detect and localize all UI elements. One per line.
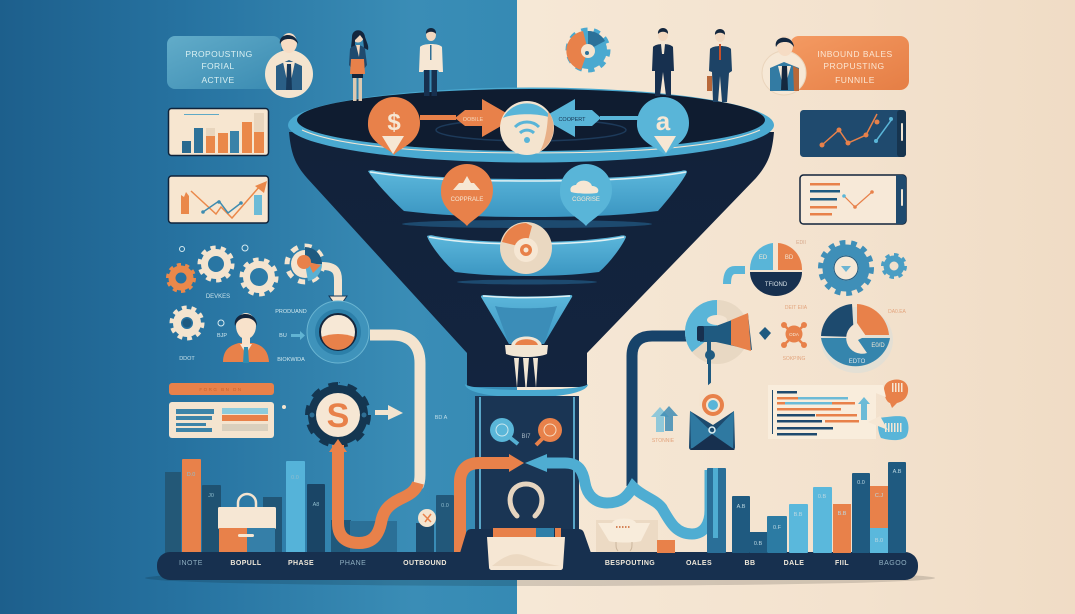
base trapezoid	[460, 529, 591, 553]
callout: blue	[868, 416, 908, 440]
base bar with labels: BB	[745, 560, 755, 567]
icon: briefcase	[218, 494, 276, 553]
pin: blue tier cloud	[560, 164, 612, 226]
phone card: line chart	[800, 110, 906, 157]
arrow: gear to gauge	[322, 266, 338, 298]
bar chart: right: A.B	[737, 504, 746, 510]
pipe: small light blue	[727, 270, 745, 284]
funnel tier 3	[481, 295, 572, 344]
pin: wifi circle	[500, 101, 554, 155]
title box: left: PROPOUSTING	[185, 49, 253, 59]
pin: orange dollar: $	[387, 109, 401, 136]
funnel tier 2	[427, 235, 626, 284]
pin: blue tier cloud: CGGRISE	[572, 197, 600, 203]
gear: large blue	[821, 243, 871, 293]
icon: top gear pie	[566, 30, 608, 70]
panel: right inbound column	[651, 36, 909, 450]
chart card: bars	[168, 108, 268, 156]
pipe: dark right	[632, 336, 688, 486]
pin: target circle	[500, 222, 552, 274]
bar chart: right: B.B	[838, 511, 847, 517]
pin: orange dollar	[368, 97, 420, 155]
bar chart: right: 0.B	[754, 541, 762, 547]
base bar with labels: BOPULL	[230, 560, 262, 567]
label: side: BD A	[435, 415, 448, 421]
column below funnel	[475, 396, 579, 534]
icon: orange gear	[168, 265, 194, 291]
funnel opening	[297, 89, 765, 151]
base bar with labels: PHASE	[288, 560, 314, 567]
arrow: small blue	[291, 331, 305, 340]
base bar with labels: DALE	[784, 560, 804, 567]
bar chart: left	[165, 459, 454, 553]
icon: megaphone	[685, 300, 752, 396]
bar chart: left: 0.0	[441, 503, 449, 509]
icon: horseshoe	[510, 484, 542, 516]
person: woman	[349, 30, 368, 101]
labels: beside gauge	[217, 309, 307, 363]
icon: up arrows	[651, 406, 678, 432]
icon: small coin	[418, 509, 436, 527]
arrow: blue to wifi: COOPERT	[558, 117, 586, 123]
icon: multicolour gear	[287, 246, 323, 282]
title box: right: PROPUSTING	[823, 61, 885, 71]
bar chart: right: 0.0	[857, 480, 865, 486]
gears row	[168, 245, 323, 326]
arrowhead: orange up	[329, 439, 347, 452]
bar chart: right: 0.B	[818, 494, 826, 500]
tray box	[487, 528, 565, 570]
pie chart: EDII	[796, 240, 806, 246]
title box: right: FUNNILE	[835, 75, 875, 85]
arrowhead: blue center	[525, 454, 547, 472]
title box: right: INBOUND BALES	[817, 49, 893, 59]
avatar: right presenter	[762, 36, 806, 95]
icon: orange node	[781, 322, 807, 348]
funnel body	[289, 132, 774, 387]
bowl backing card	[596, 520, 658, 553]
labels: near node: DEIT EIIA	[785, 305, 808, 311]
icon: orange magnifier	[536, 418, 562, 445]
funnel neck flange	[465, 384, 588, 398]
pin: blue a: a	[656, 106, 671, 136]
person: man cream jacket	[419, 28, 443, 96]
pie chart	[750, 240, 806, 296]
rim highlight	[302, 130, 760, 153]
pipe: orange lower left	[338, 445, 418, 543]
base bar with labels	[157, 552, 918, 580]
title box: left	[167, 36, 281, 89]
arrow: blue to wifi	[542, 99, 638, 137]
title box: right	[790, 36, 909, 90]
bar chart: right	[707, 462, 906, 553]
gear: cream single	[172, 308, 202, 338]
funnel rim	[288, 88, 774, 162]
donut chart	[821, 304, 893, 373]
label: gear: DDOT	[179, 356, 195, 362]
base bar with labels: OALES	[686, 560, 712, 567]
arrow: orange to wifi	[420, 99, 515, 137]
base bar with labels: PHANE	[340, 560, 366, 567]
person: man with case	[707, 29, 732, 102]
label: gears: DEVKES	[206, 294, 230, 300]
orange block	[657, 540, 675, 553]
title box: left: ACTIVE	[201, 75, 235, 85]
bar chart: left: A8	[313, 502, 319, 508]
arrow: right cream	[375, 405, 403, 420]
label: column: BI7	[521, 434, 531, 440]
gear: dollar S: S	[327, 397, 349, 435]
pipe: blue right	[543, 463, 710, 534]
funnel spout ring	[505, 336, 548, 394]
pie chart: ED	[759, 255, 768, 261]
icon: envelope	[689, 381, 735, 450]
pin: orange tier	[441, 164, 493, 226]
phone card: list chart	[800, 175, 906, 224]
bar chart: right: C.J	[875, 493, 883, 499]
base shadow	[145, 570, 935, 586]
base bar with labels: FIIL	[835, 560, 849, 567]
bar chart: right: B.0	[875, 538, 883, 544]
labels: near node: DA0.EA	[888, 309, 907, 315]
bar chart: right: A.B	[893, 469, 902, 475]
labels: near node: SOKPING	[783, 356, 805, 362]
person: orange suit	[223, 313, 269, 363]
person: man black suit	[652, 28, 674, 96]
panel: left outbound column	[167, 33, 448, 486]
arrow: orange to wifi: OOBILE	[463, 117, 484, 123]
funnel tier 1	[368, 170, 687, 228]
background: cream right half	[517, 0, 1075, 614]
gauge circle	[307, 301, 369, 363]
icon: blue magnifier	[490, 418, 518, 444]
bar chart: left: 0.0	[291, 475, 299, 481]
dot	[282, 405, 286, 409]
labels: near node: STONNIE	[652, 438, 675, 444]
pin: orange tier: COPPRALE	[451, 197, 483, 203]
chart card: trend lines	[168, 176, 268, 223]
pie chart: BD	[785, 255, 794, 261]
bar chart: left: D.0	[187, 472, 195, 478]
report panel	[768, 385, 876, 439]
donut chart: E0/D	[871, 343, 885, 349]
pipe: orange to center	[460, 463, 513, 552]
list panel: FORG BN DN	[199, 387, 243, 392]
base bar with labels: BESPOUTING	[605, 560, 655, 567]
base bar with labels: OUTBOUND	[403, 560, 447, 567]
base bar with labels: INOTE	[179, 560, 203, 567]
list panel	[169, 383, 274, 438]
labels: beside gauge: BIOKWIDA	[277, 357, 305, 363]
icon: cream gear large	[242, 260, 276, 294]
arrowhead: orange center	[509, 454, 524, 472]
title box: left: FORIAL	[201, 61, 235, 71]
arrowhead: cream down	[329, 296, 347, 309]
base bar with labels: BAGOO	[879, 560, 907, 567]
background: blue left half	[0, 0, 517, 614]
pie chart: TFIOND	[765, 282, 788, 288]
labels: beside gauge: BJP	[217, 333, 227, 339]
bar chart: right: 0.F	[773, 525, 782, 531]
pipe: cream	[370, 335, 420, 486]
gear: dollar S	[307, 384, 369, 446]
callout: orange	[855, 379, 908, 408]
gear: small blue	[883, 255, 905, 277]
bowl icon	[598, 518, 650, 551]
icon: orange node: ODA	[789, 332, 799, 337]
icon: cream gear	[200, 248, 232, 280]
funnel inner shadow	[436, 119, 626, 141]
small icon markers	[180, 245, 248, 326]
funnel	[288, 88, 774, 398]
bar chart: right: B.B	[794, 512, 803, 518]
icon: diamond	[759, 327, 771, 340]
labels: beside gauge: PRODUAND	[275, 309, 307, 315]
avatar: left presenter	[265, 33, 313, 98]
donut chart: EDTO	[849, 359, 866, 365]
pin: blue a	[637, 97, 689, 155]
labels: beside gauge: BU	[279, 333, 287, 339]
labels: near node	[652, 305, 907, 444]
bar chart: left: J0	[208, 493, 214, 499]
